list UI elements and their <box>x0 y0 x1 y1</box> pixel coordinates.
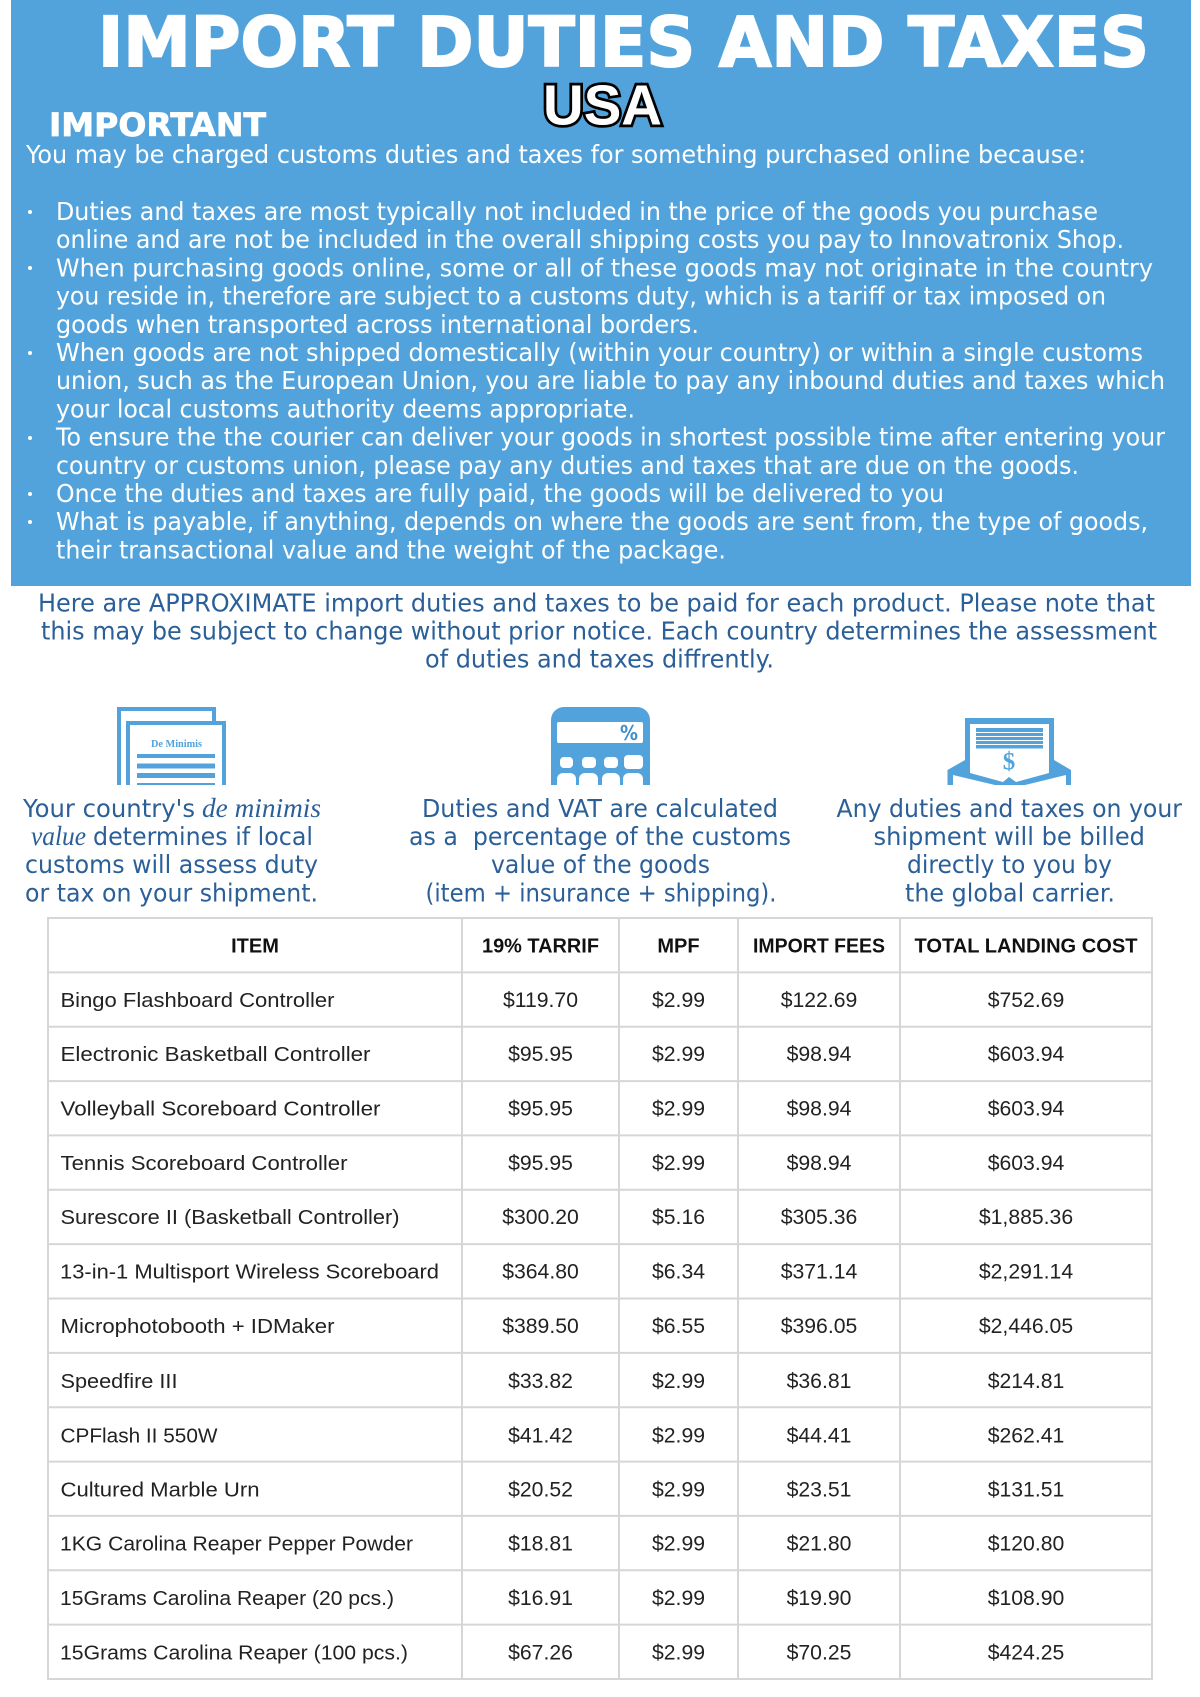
row 13: $70.25 <box>787 1641 851 1664</box>
row 12: $2.99 <box>652 1587 705 1610</box>
table: landing costs <box>48 918 1152 1679</box>
row 6: $371.14 <box>781 1260 858 1284</box>
row 1: $2.99 <box>652 989 705 1012</box>
table header: ITEM <box>231 936 279 958</box>
row 6: $6.34 <box>652 1260 705 1284</box>
text: duties and VAT: as a percentage of the customs <box>409 822 791 851</box>
text: de minimis: value <box>31 821 86 851</box>
text: duties and VAT: Duties and VAT are calculated <box>422 794 778 823</box>
row 1 <box>60 989 1064 1012</box>
approximate notice text: Here are APPROXIMATE import duties and taxes to be paid for each product. Please note that <box>38 588 1155 618</box>
row 2: Electronic Basketball Controller <box>60 1043 371 1066</box>
bullet list: union, such as the European Union, you are liable to pay any inbound duties and taxes which <box>56 366 1165 395</box>
text: duties and VAT: value of the goods <box>491 850 710 879</box>
row 9: $44.41 <box>787 1424 851 1447</box>
bullet list: When goods are not shipped domestically (within your country) or within a single customs <box>56 338 1143 367</box>
approximate notice text <box>38 588 1157 674</box>
text: de minimis: determines if local <box>93 822 313 851</box>
row 7 <box>60 1315 1073 1338</box>
title: IMPORT DUTIES AND TAXES <box>98 3 1149 83</box>
row 2 <box>60 1043 1065 1066</box>
row 8: $214.81 <box>988 1370 1064 1393</box>
row 4: Tennis Scoreboard Controller <box>60 1152 348 1175</box>
table header <box>231 936 1138 958</box>
row 4: $603.94 <box>988 1152 1065 1175</box>
bullet list: goods when transported across international borders. <box>56 310 699 339</box>
row 12: $19.90 <box>787 1587 851 1610</box>
row 7: $2,446.05 <box>979 1315 1073 1338</box>
row 5: $5.16 <box>652 1206 705 1229</box>
row 5: $305.36 <box>781 1206 857 1229</box>
row 3 <box>60 1098 1065 1120</box>
row 7: $389.50 <box>502 1315 579 1338</box>
row 10: Cultured Marble Urn <box>60 1478 260 1501</box>
row 9: CPFlash II 550W <box>60 1424 218 1447</box>
row 2: $2.99 <box>652 1043 705 1066</box>
row 5 <box>60 1206 1073 1229</box>
bullet list: To ensure the the courier can deliver your goods in shortest possible time after entering your <box>55 423 1166 452</box>
approximate notice text: of duties and taxes diffrently. <box>425 644 774 674</box>
row 10: $23.51 <box>787 1478 851 1501</box>
row 5: Surescore II (Basketball Controller) <box>60 1206 400 1229</box>
bullet list: your local customs authority deems appropriate. <box>56 394 635 423</box>
row 8: $33.82 <box>508 1370 573 1393</box>
text: billed by carrier: the global carrier. <box>905 878 1115 908</box>
row 5: $300.20 <box>502 1206 579 1229</box>
row 12: $16.91 <box>508 1587 573 1610</box>
bullet list: Once the duties and taxes are fully paid, the goods will be delivered to you <box>56 479 944 508</box>
row 13: 15Grams Carolina Reaper (100 pcs.) <box>60 1641 408 1664</box>
row 10: $2.99 <box>652 1478 705 1501</box>
row 10 <box>60 1478 1064 1501</box>
panel: important information <box>11 0 1191 586</box>
row 4: $2.99 <box>652 1152 705 1175</box>
bullet list: you reside in, therefore are subject to a customs duty, which is a tariff or tax imposed on <box>56 282 1106 311</box>
row 13: $2.99 <box>652 1641 705 1664</box>
row 3: $603.94 <box>988 1098 1065 1120</box>
row 11: $120.80 <box>988 1533 1064 1556</box>
row 1: Bingo Flashboard Controller <box>60 989 335 1012</box>
text: de minimis: de minimis <box>202 793 321 823</box>
row 4 <box>60 1152 1065 1175</box>
row 1: $119.70 <box>503 989 578 1012</box>
row 2: $603.94 <box>988 1043 1065 1066</box>
bullet list: When purchasing goods online, some or all of these goods may not originate in the country <box>56 253 1153 282</box>
row 8: Speedfire III <box>60 1370 178 1393</box>
row 6: $2,291.14 <box>979 1260 1073 1284</box>
bullet list: What is payable, if anything, depends on where the goods are sent from, the type of goods, <box>56 507 1148 536</box>
row 9 <box>60 1424 1064 1447</box>
row 1: $122.69 <box>781 989 857 1012</box>
text: de minimis: customs will assess duty <box>25 850 318 879</box>
icon: calculator <box>551 707 650 785</box>
bullet list: country or customs union, please pay any duties and taxes that are due on the goods. <box>56 451 1079 480</box>
subheading: IMPORTANT <box>49 106 266 144</box>
icon: de minimis document <box>117 707 226 785</box>
row 7: Microphotobooth + IDMaker <box>60 1315 335 1338</box>
row 6: 13-in-1 Multisport Wireless Scoreboard <box>60 1260 439 1284</box>
row 8: $36.81 <box>787 1370 851 1393</box>
row 9: $41.42 <box>508 1424 573 1447</box>
row 2: $95.95 <box>508 1043 573 1066</box>
row 2: $98.94 <box>787 1043 852 1066</box>
icon: bill envelope <box>948 718 1071 785</box>
row 3: Volleyball Scoreboard Controller <box>60 1098 381 1120</box>
row 10: $20.52 <box>508 1478 573 1501</box>
bullet list <box>28 197 1166 564</box>
text: duties and VAT: (item + insurance + shipping). <box>426 878 776 908</box>
row 7: $6.55 <box>652 1315 705 1338</box>
row 13: $67.26 <box>508 1641 573 1664</box>
row 13 <box>60 1641 1064 1664</box>
row 3: $98.94 <box>787 1098 852 1120</box>
table header: TOTAL LANDING COST <box>914 936 1138 958</box>
row 12: $108.90 <box>988 1587 1064 1610</box>
row 6: $364.80 <box>502 1260 579 1284</box>
row 5: $1,885.36 <box>979 1206 1073 1229</box>
row 12 <box>60 1587 1064 1610</box>
row 9: $262.41 <box>988 1424 1064 1447</box>
row 9: $2.99 <box>652 1424 705 1447</box>
text: de minimis: Your country's <box>22 794 195 823</box>
row 8: $2.99 <box>652 1370 705 1393</box>
row 11: $18.81 <box>508 1533 573 1556</box>
row 1: $752.69 <box>988 989 1064 1012</box>
table header: IMPORT FEES <box>753 936 885 958</box>
bullet list: online and are not be included in the overall shipping costs you pay to Innovatronix Shop. <box>56 225 1124 254</box>
table header: 19% TARRIF <box>482 936 599 958</box>
row 3: $2.99 <box>652 1098 705 1120</box>
icon: bill envelope: $ <box>1003 748 1015 776</box>
approximate notice text: this may be subject to change without prior notice. Each country determines the assessment <box>41 616 1157 646</box>
row 11 <box>60 1533 1064 1556</box>
table header: MPF <box>657 936 700 958</box>
text: de minimis: or tax on your shipment. <box>25 878 318 908</box>
bullet list: Duties and taxes are most typically not included in the price of the goods you purchase <box>56 197 1098 226</box>
text: billed by carrier <box>836 794 1183 908</box>
row 11: 1KG Carolina Reaper Pepper Powder <box>60 1533 413 1556</box>
row 3: $95.95 <box>508 1098 573 1120</box>
bullet list: their transactional value and the weight of the package. <box>56 535 726 564</box>
row 4: $98.94 <box>787 1152 852 1175</box>
row 8 <box>60 1370 1064 1393</box>
row 13: $424.25 <box>988 1641 1064 1664</box>
text: billed by carrier: directly to you by <box>907 850 1112 879</box>
text: billed by carrier: shipment will be billed <box>874 822 1145 851</box>
text: billed by carrier: Any duties and taxes on your <box>836 794 1183 823</box>
row 12: 15Grams Carolina Reaper (20 pcs.) <box>60 1587 394 1610</box>
icon: calculator: % <box>620 721 638 745</box>
text: duties and VAT <box>409 794 791 908</box>
intro line: You may be charged customs duties and taxes for something purchased online because: <box>25 140 1086 169</box>
row 7: $396.05 <box>781 1315 857 1338</box>
icon: de minimis document: De Minimis <box>151 738 203 750</box>
row 11: $21.80 <box>787 1533 851 1556</box>
row 10: $131.51 <box>988 1478 1064 1501</box>
text: de minimis <box>22 793 321 908</box>
row 4: $95.95 <box>508 1152 573 1175</box>
row 11: $2.99 <box>652 1533 705 1556</box>
country label: USA <box>543 74 662 138</box>
row 6 <box>60 1260 1073 1284</box>
